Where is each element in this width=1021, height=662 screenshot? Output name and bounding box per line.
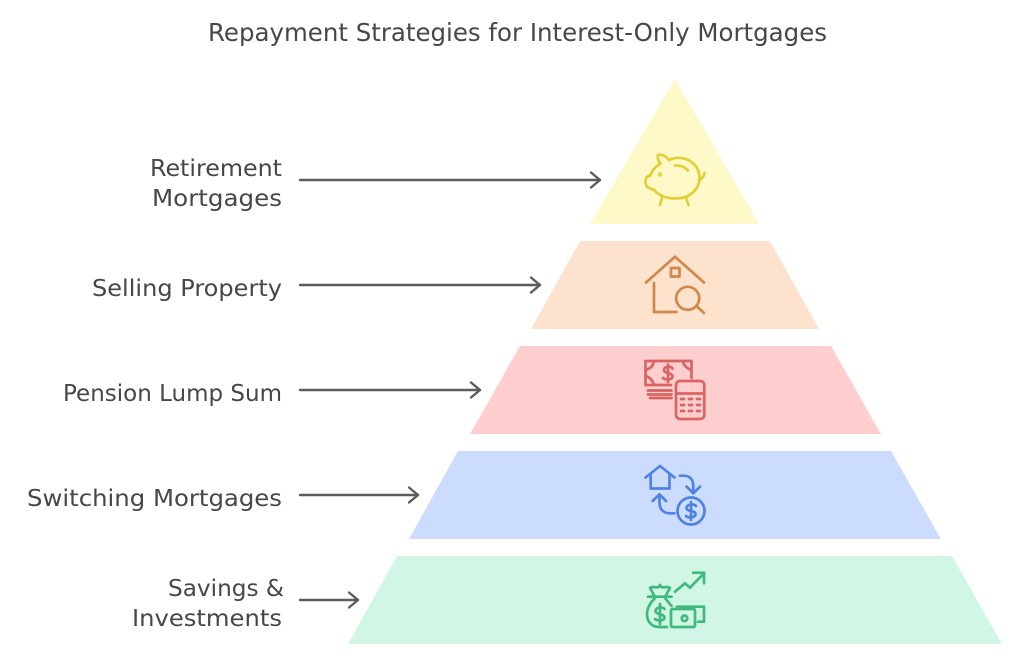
title: Repayment Strategies for Interest-Only Mortgages — [208, 18, 827, 47]
arrow: switching mortgages — [300, 488, 418, 502]
label: retirement mortgages: Mortgages — [152, 184, 282, 212]
arrow: retirement mortgages — [300, 172, 600, 188]
panel: pension lump sum tier — [470, 346, 881, 434]
panel: savings and investments tier — [348, 556, 1002, 644]
label: savings and investments — [132, 574, 284, 632]
icon: piggy bank — [646, 155, 704, 205]
panel: retirement mortgages tier — [590, 79, 759, 224]
icon: house and coin exchange — [646, 466, 704, 524]
label: selling property: Selling Property — [92, 274, 282, 302]
label: retirement mortgages — [150, 154, 282, 212]
label: savings and investments: Savings & — [168, 574, 284, 602]
arrow: pension lump sum — [300, 382, 480, 398]
arrow: selling property — [300, 278, 540, 292]
label: retirement mortgages: Retirement — [150, 154, 282, 182]
panel: switching mortgages tier — [409, 451, 941, 539]
icon: house with magnifier — [646, 257, 704, 313]
label: switching mortgages: Switching Mortgages — [27, 484, 282, 512]
icon: money bag, banknotes and growth arrow — [647, 573, 704, 627]
arrow: savings and investments — [300, 592, 358, 608]
icon: banknote and calculator — [646, 361, 704, 419]
label: savings and investments: Investments — [132, 604, 282, 632]
label: pension lump sum: Pension Lump Sum — [63, 379, 282, 407]
panel: selling property tier — [531, 241, 819, 329]
